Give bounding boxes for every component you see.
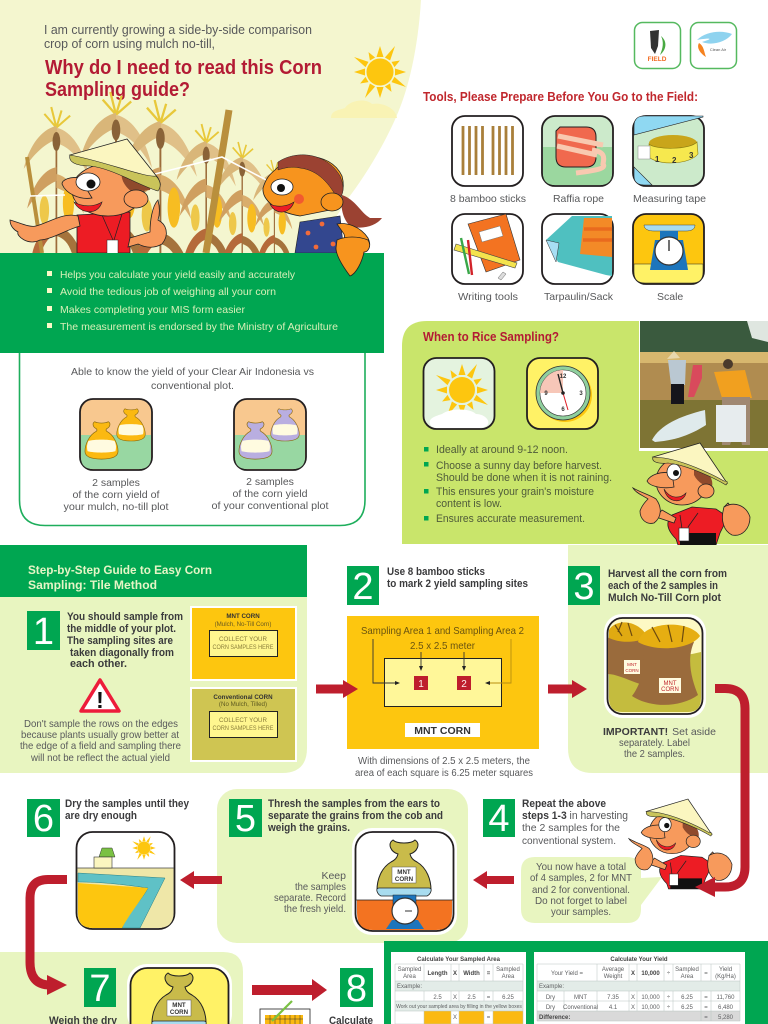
number 7: 7 [89,968,111,1010]
icon: bag on scale [352,828,457,935]
text: step 4: the 2 samples for the [522,822,620,834]
text: step 1: You should sample from [67,611,183,623]
caption: step 2: area of each square is 6.25 meter squares [355,767,533,779]
plot: conventional corn: CORN SAMPLES HERE [212,725,274,732]
text: important note: the 2 samples. [624,748,685,760]
character: pointing farmer [633,443,750,545]
arrow: step 1 to 2 [316,680,358,698]
callout: reminder: Do not forget to label [535,895,627,907]
plot: MNT corn: COLLECT YOUR [219,636,267,643]
table: yield: = [704,995,708,1001]
icon: sun [424,358,494,429]
text: step 1 [67,611,183,670]
text: important note: IMPORTANT! Set aside [603,726,716,738]
text: step 4: Repeat the above [522,798,606,810]
caption: conventional samples: of your conventional plot [212,500,329,512]
text: step 5: separate the grains from the cob and [268,810,443,822]
caption: mulch samples: of the corn yield of [72,489,160,501]
title: Sampling guide? [45,79,190,101]
table: yield: ÷ [667,971,671,977]
table: sampled area: Sampled [496,967,520,973]
heading: step-by-step guide: Step-by-Step Guide to Easy Corn [28,563,212,577]
text: important note [603,726,716,760]
intro text: I am currently growing a side-by-side comparison [44,23,312,37]
table: yield: 11,760 [717,995,735,1001]
text: warning: will not be reflect the actual yield [30,752,170,764]
text: keep separate: Keep [321,870,346,882]
illustration: bamboo sticks and rope [27,110,272,253]
text: warning [20,718,181,764]
text: step 1: each other. [70,658,127,670]
logos: FIELD [648,56,667,63]
number 3: 3 [573,566,595,608]
table: yield: MNT [574,995,587,1001]
caption: conventional samples: 2 samples [246,476,294,488]
label: scale: Scale [657,291,683,303]
plot: conventional corn: Conventional CORN [213,694,273,701]
plot: MNT corn [191,607,296,680]
callout: reminder: You now have a total [536,861,626,873]
caption: step 2 [355,755,533,779]
text: step 4 [522,798,628,847]
table: yield: Your Yield = [551,971,583,977]
table: sampled area: = [487,971,491,977]
callout: reminder: your samples. [551,906,611,918]
table: sampled area: X [453,995,457,1001]
title: Why do I need to read this Corn [45,57,322,79]
text: warning: Don't sample the rows on the edges [24,718,178,730]
icon: writing tools [452,214,523,284]
label: tape: Measuring tape [633,193,706,205]
heading: step-by-step guide: Sampling: Tile Method [28,578,157,592]
panel: step 7 [0,952,243,1024]
text: step 3 [608,568,727,604]
callout: reminder [521,857,662,923]
caption: mulch samples: 2 samples [92,477,140,489]
diagram: sampling areas: 2 [461,679,467,690]
icon: clock: 12 [560,374,567,380]
number 8 [340,968,373,1010]
icon: raffia rope [542,116,613,186]
table: yield: X [631,995,635,1001]
icon: sun and cloud [331,45,407,118]
panel: when to sample [402,321,768,545]
arrow: step 4 to 5 [473,871,514,889]
table: yield: 10,000 [641,995,660,1001]
icon: conventional corn bags [234,399,306,470]
table: yield: = [704,1015,708,1021]
bullets: when to sample: This ensures your grain's moisture [436,486,594,498]
table: yield [534,952,745,1024]
heading: when to sample: When to Rice Sampling? [423,330,559,344]
bullets: when to sample [424,444,612,525]
icon: clock: 6 [561,407,565,413]
illustration: girl [263,155,382,276]
table: yield: 6,480 [718,1005,734,1011]
icon: corn sacks [604,614,706,718]
icon: calculation sheet [260,1001,310,1024]
number 5: 5 [235,798,256,840]
arrowhead: step 3 to 4 [695,877,715,897]
text: step 5: weigh the grains. [267,822,350,834]
bullets: when to sample: Should be done when it is not raining. [436,472,612,484]
icon: corn sacks: MNT [664,681,677,687]
table: sampled area: 2.5 [467,995,476,1001]
table: sampled area: = [487,995,491,1001]
title [45,57,322,101]
plot: MNT corn: (Mulch, No-Till Corn) [215,621,271,628]
text: step 5: Thresh the samples from the ears to [268,798,440,810]
table: sampled area: Work out your sampled area by filling in the yellow boxes [396,1004,522,1010]
arrow: step 7 to 8 [252,979,327,1001]
number 7 [84,968,116,1010]
label: tarpaulin: Tarpaulin/Sack [544,291,614,303]
diagram: sampling areas: 1 [418,679,424,690]
number 6 [27,798,60,840]
table: yield: = [704,971,708,977]
table: sampled area: Width [463,971,480,977]
text: step 2: to mark 2 yield sampling sites [387,578,528,590]
bullets: when to sample: content is low. [436,498,502,510]
text: keep separate: the samples [295,881,346,893]
panel: step 1 [0,545,307,773]
table: yield: (Kg/Ha) [715,974,736,980]
icon: measuring tape: 2 [672,156,677,165]
caption: conventional samples: of the corn yield [232,488,308,500]
logos [634,22,736,68]
table: yield: ÷ [667,995,671,1001]
icon: corn sacks: CORN [625,668,639,673]
icon: warning [81,680,119,713]
icon: 8 bamboo sticks [452,116,523,186]
icon: measuring tape [633,116,704,186]
text: step 3: Harvest all the corn from [608,568,727,580]
number 4: 4 [488,798,510,840]
table: yield: 6.25 [681,995,693,1001]
table: sampled area: X [453,1015,457,1021]
table: yield: 5,280 [718,1015,734,1021]
icon: dry bag on scale [127,964,232,1024]
table: yield: Dry [546,1005,555,1011]
table: yield: Average [602,967,625,973]
text: step 3: each of the 2 samples in [608,580,718,592]
table: yield: Calculate Your Yield [610,957,668,963]
table: yield: Difference: [539,1015,570,1021]
number 3 [568,566,600,608]
table: yield: 10,000 [641,1005,660,1011]
label: writing tools: Writing tools [458,291,518,303]
table: sampled area: 2.5 [433,995,442,1001]
text: step 2 [387,566,528,590]
icon: warning: ! [96,687,104,713]
icon: corn sacks: MNT [627,662,637,667]
table: yield: = [704,1005,708,1011]
panel: yield comparison: Able to know the yield of your Clear Air Indonesia vs [71,366,314,378]
panel: green benefits band: Helps you calculate your yield easily and accurately [60,269,296,281]
character: farmer [629,799,732,889]
label: raffia: Raffia rope [553,193,604,205]
text: step 1: The sampling sites are [67,635,173,647]
logos: Clean Air [710,47,727,52]
plot: MNT corn: MNT CORN [226,613,260,620]
panel: yield comparison [20,353,365,526]
icon: clock: 3 [579,391,583,397]
bullets: when to sample: Ideally at around 9-12 noon. [436,444,568,456]
table: yield: Weight [604,974,623,980]
text: keep separate: separate. Record [274,892,346,904]
table: sampled area: Length [428,971,448,977]
table: yield: X [631,971,635,977]
plot: conventional corn: COLLECT YOUR [219,717,267,724]
number 1 [27,611,60,653]
table: yield: 4.1 [609,1005,618,1011]
girl's pointing hand over band [336,237,370,276]
text: keep separate: the fresh yield. [284,903,346,915]
table: yield: Conventional [563,1005,598,1011]
icon: clock [527,358,598,429]
table: sampled area: Calculate Your Sampled Area [417,957,501,963]
diagram: sampling areas: MNT CORN [414,725,471,737]
number 1: 1 [33,611,54,653]
text: keep separate [274,870,346,915]
arrow: step 5 to 6 [180,871,222,889]
icon: drying on tarpaulin [76,832,174,929]
panel: green benefits band [0,253,384,353]
icon: scale [633,214,704,284]
text: important note: separately. Label [619,737,690,749]
diagram: sampling areas: Sampling Area 1 and Sampling Area 2 [361,625,524,637]
table: yield: Example: [539,984,564,990]
icon: mulch corn bags [80,399,152,470]
table: sampled area: = [487,1015,491,1021]
icon: measuring tape: 1 [655,155,660,164]
text: warning: the edge of a field and sampling there [20,740,181,752]
table: sampled area: Sampled [398,967,421,973]
caption: step 2: With dimensions of 2.5 x 2.5 meters, the [358,755,530,767]
text: step 2: Use 8 bamboo sticks [387,566,485,578]
icon: clock: 9 [544,391,548,397]
photo: field sampling [639,321,768,451]
intro text: crop of corn using mulch no-till, [44,37,215,51]
text: step 3: Mulch No-Till Corn plot [608,592,721,604]
step 4 [483,798,732,923]
panel: calculation tables [384,941,768,1024]
step 6 [27,798,189,929]
illustration: farmer boy [10,139,166,254]
callout: reminder: and 2 for conventional. [532,884,630,896]
table: sampled area [391,952,526,1024]
table: yield: 10,000 [641,971,660,977]
panel: green benefits band: Makes completing your MIS form easier [60,304,245,316]
icon: corn sacks: CORN [661,687,679,693]
panel: yield comparison: conventional plot. [151,380,234,392]
table: sampled area: 6.25 [502,995,514,1001]
table: sampled area: Area [502,974,515,980]
text: step 4: conventional system. [522,835,616,847]
text: step 6: Dry the samples until they [65,798,189,810]
curved arrow: step 6 to 7 [30,880,67,995]
table: yield: Sampled [675,967,699,973]
callout: reminder: of 4 samples, 2 for MNT [530,872,633,884]
step 2 [347,566,539,779]
plot: conventional corn [191,688,296,761]
caption: conventional samples [212,476,329,512]
table: sampled area: Example: [397,984,422,990]
intro text [44,23,312,51]
text: step 6 [65,798,189,822]
caption: mulch samples: your mulch, no-till plot [64,501,169,513]
caption: mulch samples [64,477,169,513]
panel: green benefits band: Avoid the tedious job of weighing all your corn [60,286,276,298]
arrow: step 2 to 3 [548,680,587,698]
table: yield: X [631,1005,635,1011]
number 2: 2 [352,566,374,608]
heading: tools: Tools, Please Prepare Before You Go to the Field: [423,90,698,104]
number 4 [483,798,515,840]
table: sampled area: X [453,971,457,977]
plot: conventional corn: (No Mulch, Tilled) [219,701,267,708]
illustration: corn plants [24,92,296,263]
text: step 6: are dry enough [65,810,137,822]
number 2 [347,566,379,608]
text: step 4: steps 1-3 in harvesting [522,810,628,822]
icon: measuring tape: 3 [689,151,694,160]
number 5 [229,798,262,840]
text: step 5 [267,798,443,834]
panel: green benefits band: The measurement is endorsed by the Ministry of Agriculture [60,321,338,333]
table: yield: Dry [546,995,555,1001]
table: yield: Area [681,974,694,980]
text: step 1: the middle of your plot. [67,623,176,635]
table: sampled area: Area [403,974,416,980]
curved arrow: step 3 to 4 [712,688,745,887]
panel: step 3 [568,545,768,773]
number 8: 8 [346,968,367,1010]
bullets: when to sample: Ensures accurate measurement. [436,513,585,525]
number 6: 6 [33,798,54,840]
top background shape [0,0,421,253]
table: yield: Yield [719,967,732,973]
diagram: sampling areas: 2.5 x 2.5 meter [410,640,475,652]
text: step 1: taken diagonally from [70,647,174,659]
panel: step 5 [217,789,468,943]
bullets: when to sample: Choose a sunny day before harvest. [436,460,602,472]
icon: tarpaulin [542,214,613,284]
text: warning: because plants usually grow better at [21,729,179,741]
table: yield: 7.35 [607,995,619,1001]
table: yield: 6.25 [681,1005,693,1011]
table: yield: ÷ [667,1005,671,1011]
label: bamboo: 8 bamboo sticks [450,193,526,205]
heading: step-by-step guide [0,545,307,597]
plot: MNT corn: CORN SAMPLES HERE [212,644,274,651]
diagram: sampling areas [347,616,539,749]
